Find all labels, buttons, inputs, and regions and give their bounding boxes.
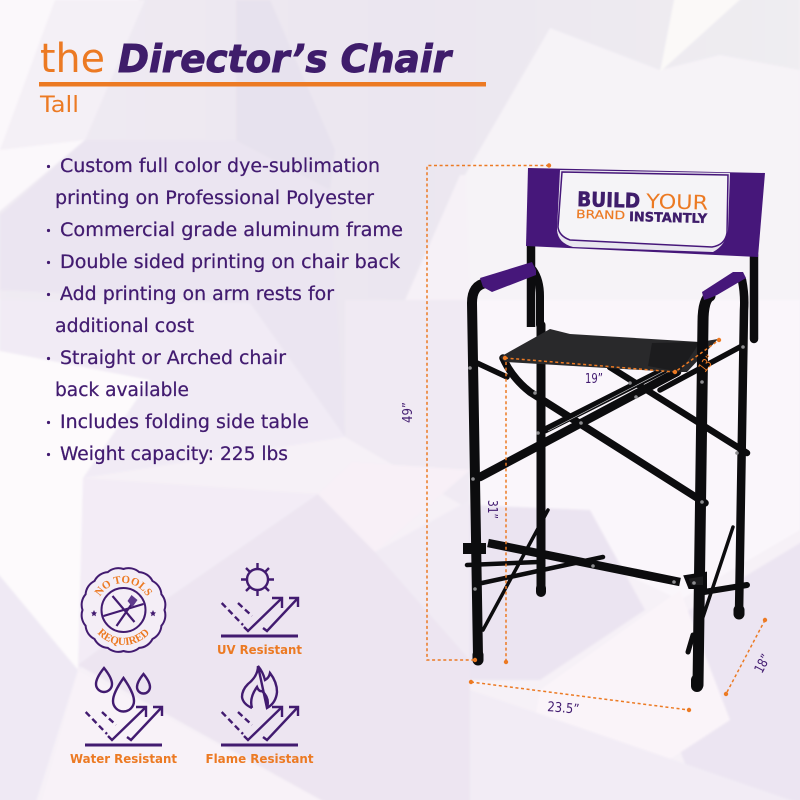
title: Director’s Chair xyxy=(118,37,453,81)
badge: no tools required: REQUIRED xyxy=(97,628,148,646)
feature list: additional cost xyxy=(55,316,194,337)
dimension lines xyxy=(427,163,767,712)
banner slogan: BRAND xyxy=(576,207,625,222)
icon: water resistant xyxy=(85,668,162,745)
label: water resistant: Water Resistant xyxy=(70,751,177,766)
label: flame resistant: Flame Resistant xyxy=(206,751,314,766)
feature list: back available xyxy=(55,380,189,401)
feature list xyxy=(47,156,403,465)
dimension labels: 18” xyxy=(751,652,774,676)
seat cross braces xyxy=(477,347,747,503)
chair illustration xyxy=(465,168,765,686)
banner slogan xyxy=(576,187,709,227)
title: the xyxy=(40,36,105,82)
dimension labels: 13” xyxy=(696,352,719,375)
badge: no tools required: NO TOOLS xyxy=(94,576,152,596)
rear legs and posts xyxy=(531,245,754,614)
feature list: Weight capacity: 225 lbs xyxy=(60,444,288,465)
icon: flame xyxy=(242,666,277,708)
dimension labels xyxy=(400,352,774,718)
feature list: printing on Professional Polyester xyxy=(55,188,374,209)
brace highlight xyxy=(548,371,664,431)
arm pads xyxy=(480,262,746,300)
icon: water drops xyxy=(96,668,150,712)
frame rivets xyxy=(468,345,745,591)
icon: sun xyxy=(241,563,274,596)
feature list: Straight or Arched chair xyxy=(60,348,286,369)
dimension labels: 49” xyxy=(400,402,416,423)
icon: UV resistant xyxy=(221,563,298,636)
chair back banner xyxy=(526,168,765,257)
feature list: Add printing on arm rests for xyxy=(60,284,334,305)
title xyxy=(39,36,486,86)
footrest and side table xyxy=(465,510,747,686)
feature list: Includes folding side table xyxy=(60,412,309,433)
badge: no tools required xyxy=(80,567,166,653)
seat xyxy=(500,329,718,372)
icon: rays and arrows xyxy=(221,707,298,745)
feature list: Double sided printing on chair back xyxy=(60,252,400,273)
feature list: Commercial grade aluminum frame xyxy=(60,220,403,241)
label: UV resistant: UV Resistant xyxy=(217,642,302,657)
banner slogan: YOUR xyxy=(645,189,709,215)
front legs and arms xyxy=(472,283,710,685)
dimension labels: 19” xyxy=(585,371,603,387)
dimension labels: 31” xyxy=(484,500,500,519)
icon: flame resistant xyxy=(221,666,298,745)
banner slogan: INSTANTLY xyxy=(629,210,708,227)
banner slogan: BUILD xyxy=(577,187,640,213)
subtitle: Tall xyxy=(39,93,79,118)
dimension labels: 23.5” xyxy=(547,699,580,718)
icon: rays and arrows xyxy=(85,707,162,745)
icon: rays and arrows xyxy=(221,598,298,636)
feature list: Custom full color dye-sublimation xyxy=(60,156,380,177)
